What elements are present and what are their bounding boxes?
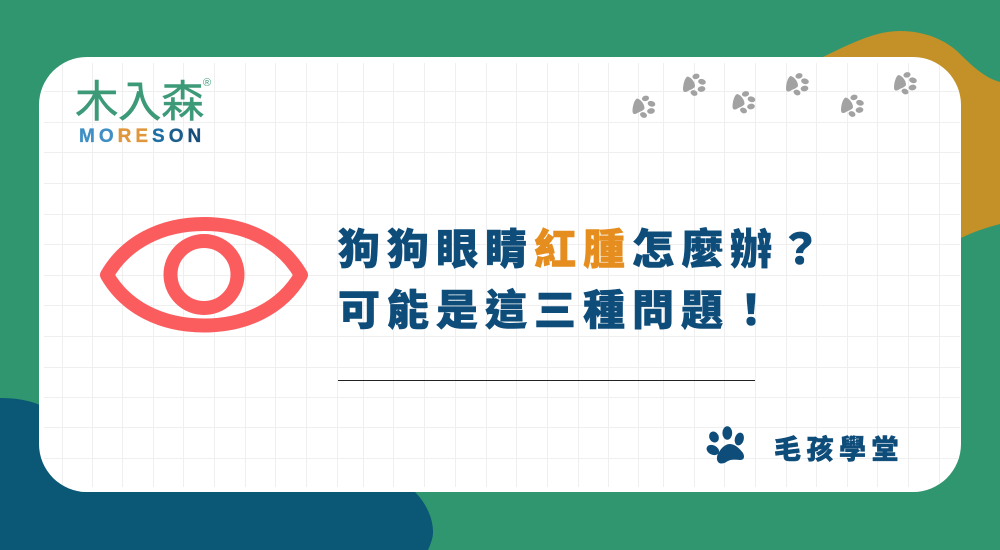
paw 2 (683, 73, 706, 97)
logo chinese wordmark: 木入森 (75, 67, 204, 130)
paw 4 (786, 72, 809, 96)
gold blob (823, 31, 1000, 238)
registered mark: ® (203, 77, 211, 89)
paw prints trail (632, 71, 917, 119)
title line 1: 狗狗眼睛紅腫怎麼辦？ (338, 216, 828, 277)
logo (75, 67, 211, 147)
icon: blue paw (705, 426, 745, 464)
paw 5 (841, 94, 864, 118)
blue blob (0, 398, 433, 550)
title line 2: 可能是這三種問題！ (338, 277, 779, 338)
divider line (338, 380, 755, 382)
logo latin wordmark: MORESON (79, 126, 205, 147)
grid (44, 63, 960, 487)
white card (39, 57, 961, 492)
category label: 毛孩學堂 (774, 428, 904, 467)
paw 6 (894, 71, 917, 95)
paw 1 (632, 95, 656, 119)
paw 3 (732, 90, 756, 114)
icon: red eye (107, 224, 301, 326)
